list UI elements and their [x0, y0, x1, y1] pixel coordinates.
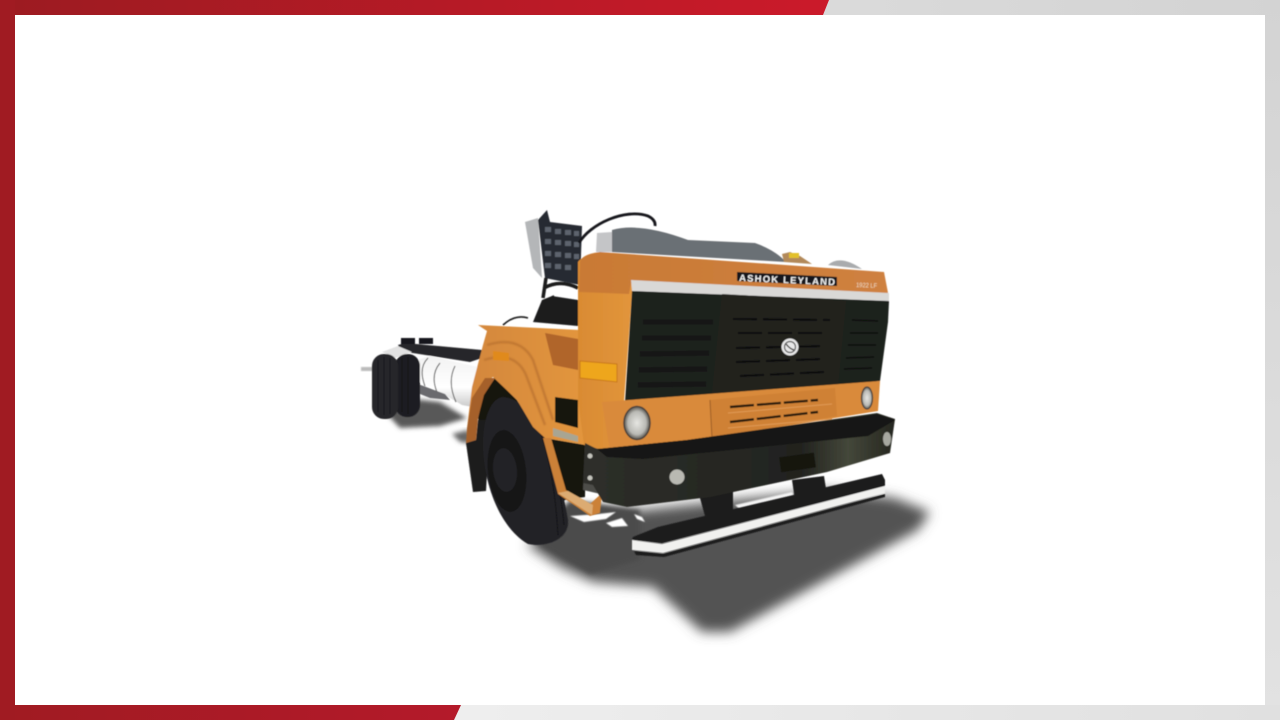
white stripe — [631, 280, 889, 301]
grille logo — [782, 338, 798, 356]
front underrun guard — [632, 474, 885, 557]
cab step with strip — [543, 438, 602, 516]
cab side and fender — [467, 325, 586, 445]
mudguard bracket — [583, 443, 605, 495]
rear chassis with tanks — [382, 338, 482, 408]
fender inner skirt — [466, 378, 495, 443]
amber indicator — [580, 361, 617, 382]
model badge: 1922 LF — [856, 282, 877, 290]
left headlight — [624, 406, 650, 440]
side marker lamp — [493, 351, 509, 361]
side step plate — [553, 428, 578, 442]
support brackets — [700, 476, 827, 516]
front tyre — [483, 397, 568, 545]
wheel well — [478, 378, 586, 520]
ground shadow — [361, 367, 930, 632]
lower front panel — [602, 381, 880, 452]
cab front pillar — [578, 255, 632, 452]
hood front orange panel — [579, 252, 889, 298]
front bumper — [583, 413, 895, 507]
cab seat and steering — [503, 210, 655, 326]
brand badge: ASHOK LEYLAND — [739, 273, 835, 288]
mudflap — [466, 420, 490, 492]
side opening — [555, 397, 578, 428]
truck — [372, 210, 895, 557]
hood top cover — [596, 228, 862, 269]
fender ridges — [484, 342, 553, 425]
lower vent panel — [710, 388, 837, 438]
right headlight — [862, 387, 872, 409]
black grille — [625, 291, 889, 402]
cab side recess — [545, 333, 578, 370]
rear dual wheels — [372, 354, 420, 419]
